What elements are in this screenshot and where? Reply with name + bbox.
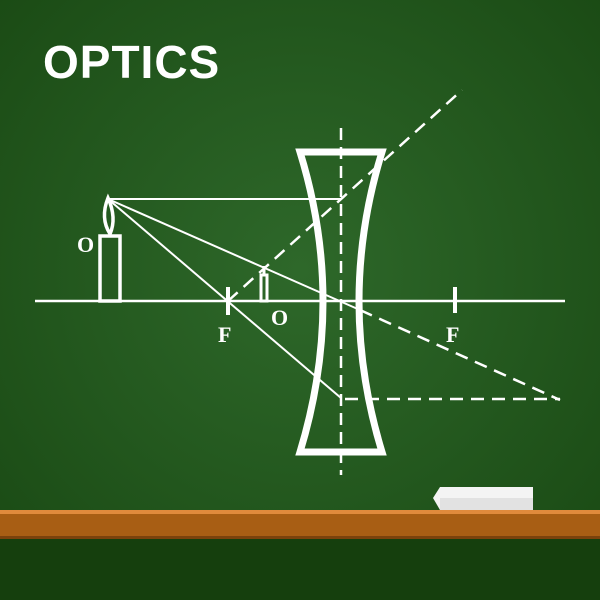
focal ticks — [226, 287, 230, 315]
chalk — [433, 487, 533, 510]
image candle — [261, 266, 267, 301]
concave lens — [300, 152, 382, 452]
labels: O — [77, 232, 94, 257]
lens centre line — [340, 128, 342, 475]
optical axis — [35, 300, 565, 302]
candle object — [100, 198, 120, 301]
labels: O — [271, 305, 288, 330]
title: OPTICS — [43, 36, 220, 88]
rays — [108, 199, 360, 398]
labels: F — [446, 322, 459, 347]
labels: F — [218, 322, 231, 347]
labels — [77, 232, 459, 347]
optical diagram — [35, 90, 565, 475]
shelf — [0, 510, 600, 539]
